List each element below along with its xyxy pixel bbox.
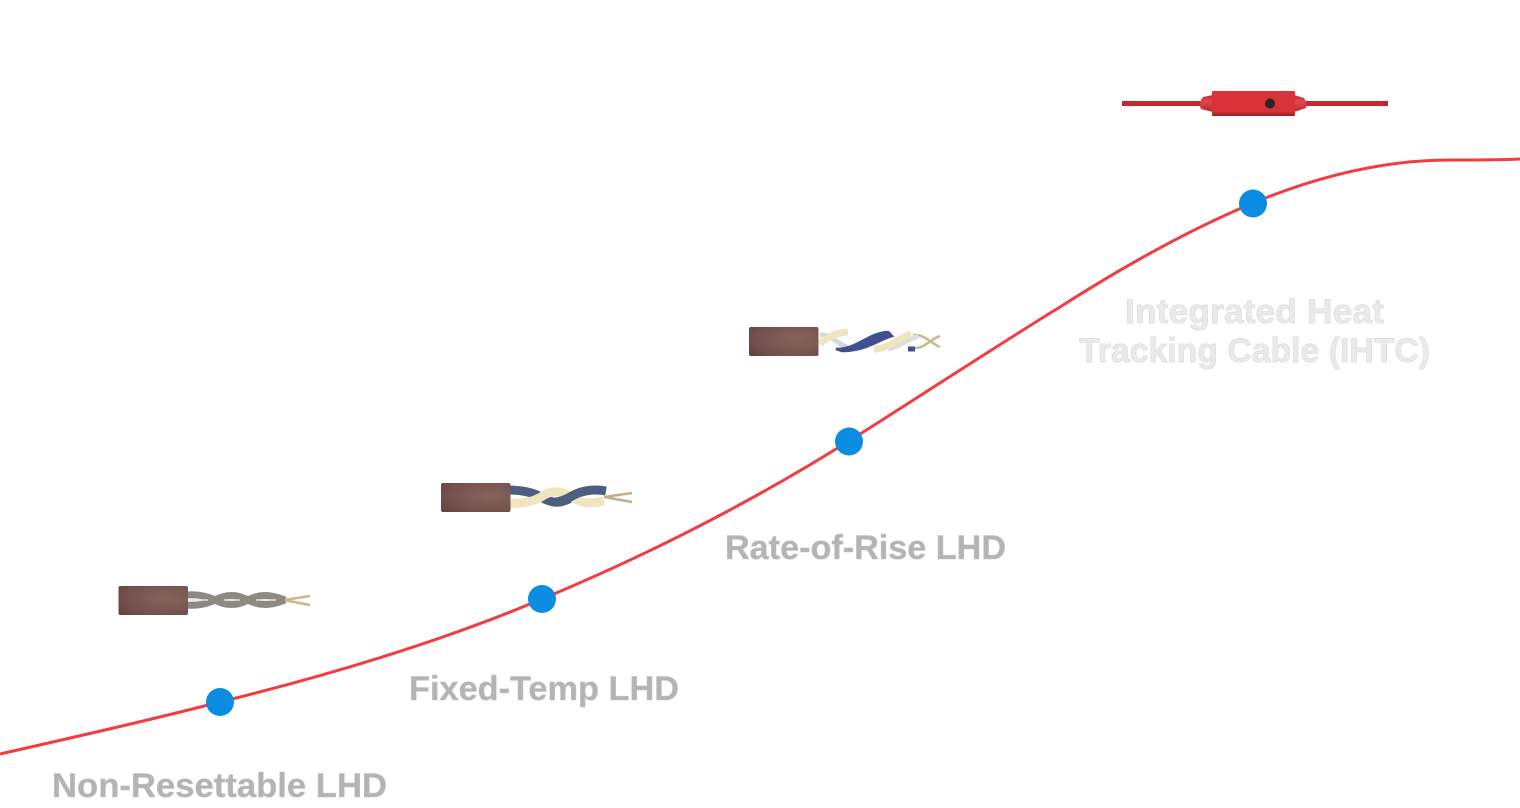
milestone dot: Fixed-Temp LHD	[528, 585, 556, 613]
milestone dot: Non-Resettable LHD	[206, 688, 234, 716]
icon: non-resettable cable	[118, 586, 310, 615]
icon: fixed-temperature cable	[441, 483, 632, 512]
milestone dot: Integrated Heat Tracking Cable	[1239, 190, 1267, 218]
label: Non-Resettable LHD: Non-Resettable LHD	[52, 767, 387, 805]
milestone dot: Rate-of-Rise LHD	[835, 428, 863, 456]
growth curve	[0, 159, 1520, 754]
label: Rate-of-Rise LHD: Rate-of-Rise LHD	[725, 529, 1006, 567]
label: Integrated Heat Tracking Cable (IHTC)	[1079, 293, 1430, 370]
label: Integrated Heat Tracking Cable (IHTC): Tracking Cable (IHTC)	[1079, 332, 1430, 370]
label: Integrated Heat Tracking Cable (IHTC): Integrated Heat	[1125, 293, 1384, 331]
icon: integrated heat tracking cable	[1122, 91, 1388, 116]
icon: rate-of-rise cable	[749, 327, 940, 356]
label: Fixed-Temp LHD: Fixed-Temp LHD	[409, 670, 679, 708]
